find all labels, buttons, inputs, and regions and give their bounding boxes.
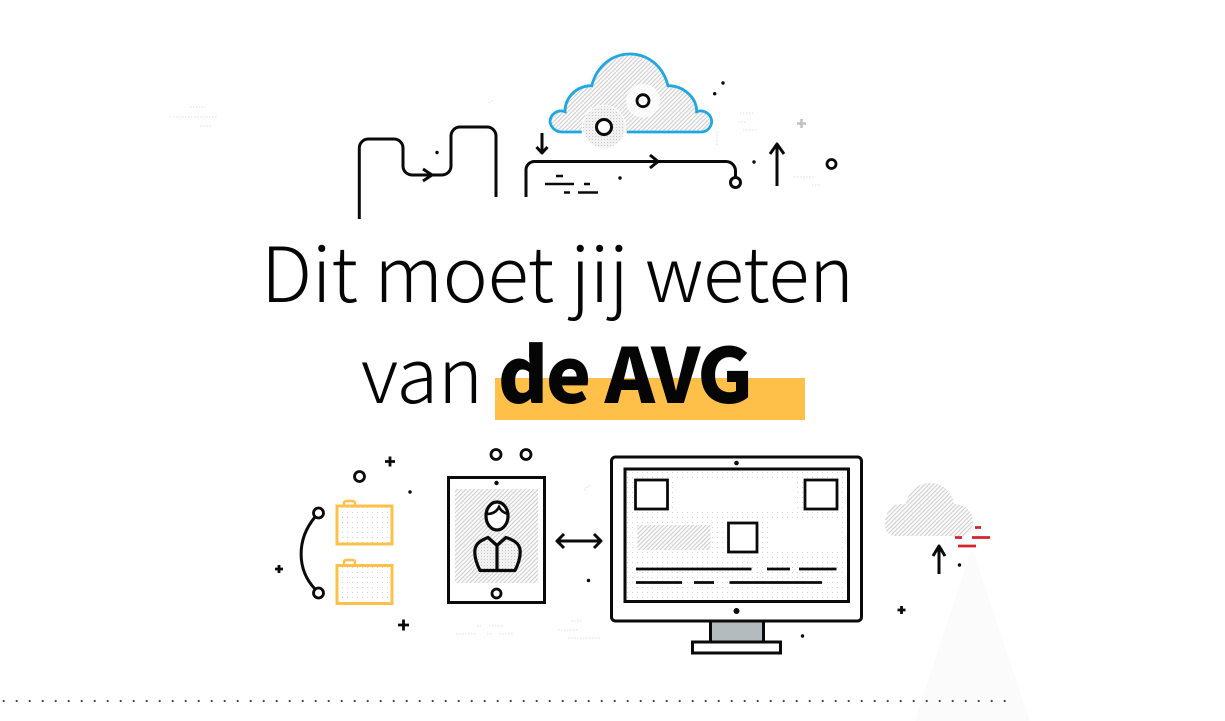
connector arc — [301, 508, 324, 598]
flow line with arrow and ring — [526, 155, 740, 197]
up arrow — [770, 144, 784, 186]
title — [261, 214, 854, 425]
highlight bar — [495, 378, 805, 420]
faint marks — [489, 100, 820, 185]
red dashes — [955, 528, 990, 546]
white panels — [676, 480, 796, 510]
top circuit illustration — [359, 54, 836, 219]
faint marks under tablet — [456, 485, 601, 638]
ring right — [827, 160, 836, 168]
title line 2 light: van — [361, 315, 483, 425]
down arrow — [536, 133, 548, 153]
grey plus — [797, 119, 806, 128]
hatched screen — [455, 489, 538, 583]
tablet with person — [448, 478, 544, 602]
bezel — [612, 457, 862, 621]
cloud with gears — [550, 54, 712, 149]
folder top — [337, 501, 392, 544]
gear white — [626, 84, 660, 118]
faint decorative text-lines left — [170, 107, 217, 126]
hatched block — [638, 525, 710, 550]
grey cloud — [885, 483, 973, 536]
screen — [625, 469, 848, 602]
up arrow small — [933, 546, 945, 574]
dotted baseline — [4, 700, 1007, 702]
faint triangle background — [915, 548, 1030, 721]
right accents — [801, 563, 961, 638]
title line 1: Dit moet jij weten — [261, 214, 854, 324]
title line 2 bold: de AVG — [498, 315, 753, 425]
plus and ring accents — [275, 456, 412, 630]
folders group — [275, 456, 412, 630]
screen squares — [636, 480, 837, 552]
desktop monitor — [612, 457, 862, 653]
double arrow — [557, 534, 601, 548]
small dots — [435, 81, 756, 180]
text lines — [636, 569, 836, 582]
gear grey — [582, 105, 626, 149]
stand — [710, 620, 764, 642]
winding path with arrow — [359, 127, 496, 219]
dashes — [545, 176, 598, 192]
person icon — [475, 502, 520, 570]
rings above tablet — [491, 450, 531, 460]
folder bottom — [337, 560, 392, 604]
